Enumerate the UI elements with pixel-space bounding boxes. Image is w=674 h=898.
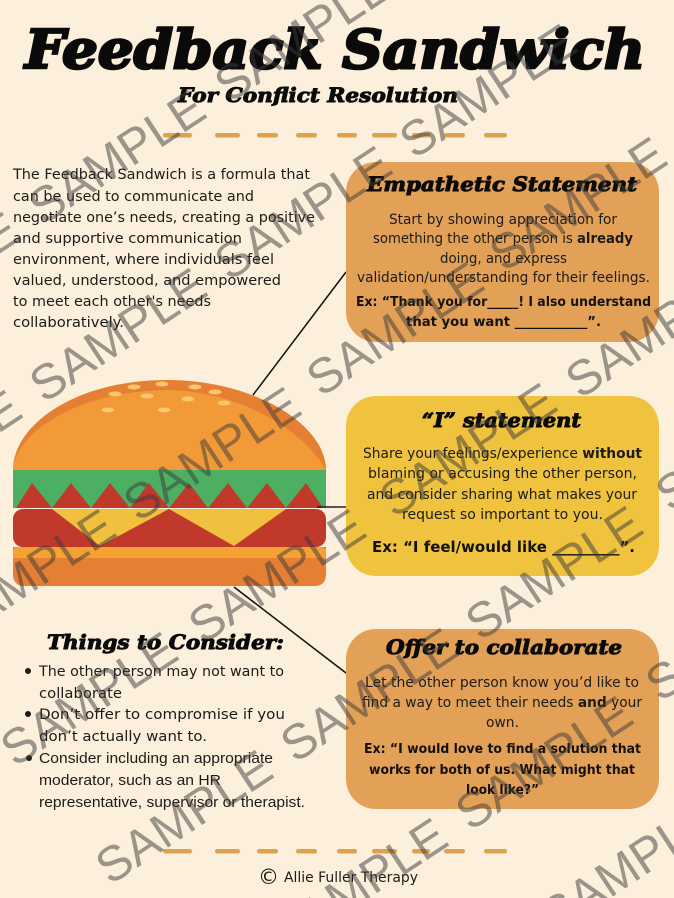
intro paragraph: collaboratively. (13, 315, 124, 331)
text: offer example: look like?” (466, 782, 539, 798)
footer credit: Allie Fuller Therapy (284, 870, 418, 886)
heading: empathetic statement: Empathetic Statement (366, 172, 638, 196)
bottom dashed divider (163, 849, 507, 854)
connector: bottom bun to offer to collaborate (234, 587, 346, 673)
subtitle: For Conflict Resolution (177, 83, 458, 107)
list: things to consider: Don’t offer to compromise if you (39, 707, 285, 723)
watermark: repeated SAMPLE text: SAMPLE (19, 80, 215, 235)
text: offer body (362, 675, 642, 731)
text: offer body: find a way to meet their needs and your (362, 695, 642, 711)
intro paragraph: and supportive communication (13, 231, 242, 247)
watermark: repeated SAMPLE text: SAMPLE (179, 499, 375, 654)
footer credit (258, 865, 418, 889)
watermark: repeated SAMPLE text: SAMPLE (480, 127, 674, 282)
list: things to consider (25, 664, 305, 811)
intro paragraph: negotiate one’s needs, creating a positive (13, 210, 315, 226)
title: Feedback Sandwich (23, 19, 645, 81)
intro paragraph: can be used to communicate and (13, 189, 254, 205)
intro paragraph: valued, understood, and empowered (13, 273, 281, 289)
text: offer body: own. (486, 715, 519, 731)
text: offer body: Let the other person know you’d like to (365, 675, 639, 691)
text: I statement body (363, 446, 642, 523)
top dashed divider (163, 133, 507, 138)
text: I statement example: Ex: “I feel/would like _________”. (372, 538, 635, 556)
text: empathetic example: that you want ___________”. (406, 314, 601, 330)
list: things to consider: collaborate (39, 686, 122, 702)
text: I statement body: request so important to you. (402, 507, 603, 523)
intro paragraph: environment, where individuals feel (13, 252, 274, 268)
watermark: repeated SAMPLE text: SAMPLE (20, 258, 216, 413)
text: empathetic body: doing, and express (440, 251, 567, 267)
connector: filling to I statement (317, 506, 346, 508)
watermark: repeated SAMPLE text: SAMPLE (390, 14, 586, 169)
list: things to consider: representative, supervisor or therapist. (39, 794, 305, 811)
list: things to consider: moderator, such as an HR (39, 772, 221, 789)
text: I statement body: Share your feelings/experience without (363, 446, 642, 462)
text: empathetic example (356, 294, 651, 330)
intro paragraph: The Feedback Sandwich is a formula that (12, 167, 310, 183)
watermark: repeated SAMPLE text: SAMPLE (86, 740, 282, 895)
list: things to consider: Consider including an appropriate (39, 750, 273, 767)
text: I statement body: blaming or accusing the other person, (368, 466, 637, 482)
text: offer example (364, 741, 642, 798)
watermark: repeated SAMPLE text: SAMPLE (114, 377, 310, 532)
text: empathetic body (357, 212, 650, 286)
panel: empathetic statement (346, 162, 659, 342)
watermark: repeated SAMPLE text: SAMPLE (205, 136, 401, 291)
list: things to consider: don’t actually want to. (39, 729, 207, 745)
watermark: repeated SAMPLE text: SAMPLE (446, 686, 642, 841)
intro paragraph (12, 167, 315, 331)
watermark: repeated SAMPLE text: SAMPLE (370, 373, 566, 528)
text: offer example: works for both of us. What might that (369, 762, 635, 778)
heading: offer to collaborate: Offer to collaborate (386, 635, 622, 659)
text: empathetic body: Start by showing appreciation for (389, 212, 617, 228)
panel: offer to collaborate (346, 629, 659, 809)
text: empathetic body: validation/understanding for their feelings. (357, 270, 650, 286)
text: empathetic example: Ex: “Thank you for_____! I also understand (356, 294, 651, 310)
list: things to consider: The other person may not want to (38, 664, 284, 680)
text: empathetic body: something the other person is already (373, 231, 633, 247)
connector: bun to empathetic statement (253, 272, 346, 395)
footer credit: © (258, 865, 279, 889)
watermark: repeated SAMPLE text: SAMPLE (456, 496, 652, 651)
watermark: repeated SAMPLE text: SAMPLE (297, 252, 493, 407)
panel: I statement (346, 396, 659, 576)
heading: things to consider: Things to Consider: (47, 630, 284, 654)
watermark: repeated SAMPLE text: SAMPLE (271, 618, 467, 773)
text: offer example: Ex: “I would love to find a solution that (364, 741, 642, 757)
intro paragraph: to meet each other's needs (13, 294, 211, 310)
text: I statement body: and consider sharing what makes your (367, 487, 637, 503)
icon: burger (13, 380, 326, 586)
heading: I statement: “I” statement (422, 408, 582, 432)
